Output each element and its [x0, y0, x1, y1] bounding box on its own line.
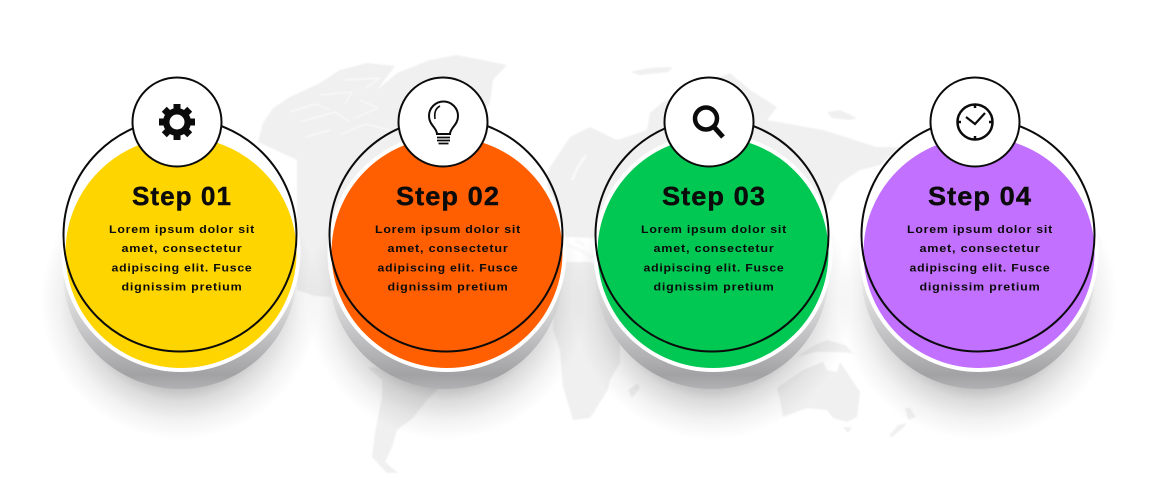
- step 03 card: [572, 78, 852, 440]
- shadow 02: [306, 155, 586, 440]
- icon: gear: [159, 104, 195, 140]
- body text 03: adipiscing elit. Fusce: [644, 262, 784, 274]
- body text 02: dignissim pretium: [388, 282, 508, 294]
- icon: clock: [957, 104, 993, 140]
- colour disc 01: [64, 135, 298, 370]
- body text 02: Lorem ipsum dolor sit: [375, 224, 521, 236]
- body text 03: dignissim pretium: [654, 282, 774, 294]
- body text 01: Lorem ipsum dolor sit: [109, 224, 255, 236]
- icon: light bulb: [429, 102, 458, 144]
- colour disc 03: [596, 135, 830, 370]
- body text 04: Lorem ipsum dolor sit: [907, 224, 1053, 236]
- shadow 01: [40, 155, 320, 440]
- icon circle 01: [132, 78, 222, 166]
- body text 01: adipiscing elit. Fusce: [112, 262, 252, 274]
- body text 01: amet, consectetur: [122, 243, 243, 255]
- body text 02: [375, 224, 521, 294]
- world map background: [258, 55, 916, 473]
- body text 03: [641, 224, 787, 294]
- step 02 card: [306, 78, 586, 440]
- icon: magnifier: [695, 108, 723, 137]
- colour disc 04: [862, 135, 1096, 370]
- step 04 card: [838, 78, 1118, 440]
- body text 02: amet, consectetur: [388, 243, 509, 255]
- icon circle 03: [664, 78, 754, 166]
- icon circle 04: [930, 78, 1020, 166]
- heading 01: Step 01: [132, 181, 232, 211]
- colour disc 02: [330, 135, 564, 370]
- body text 02: adipiscing elit. Fusce: [378, 262, 518, 274]
- icon circle 02: [398, 78, 488, 166]
- outline ring 02: [330, 118, 562, 352]
- map land masses: [258, 55, 916, 473]
- body text 03: Lorem ipsum dolor sit: [641, 224, 787, 236]
- body text 01: dignissim pretium: [122, 282, 242, 294]
- heading 03: Step 03: [662, 181, 766, 211]
- body text 04: dignissim pretium: [920, 282, 1040, 294]
- body text 03: amet, consectetur: [654, 243, 775, 255]
- body text 01: [109, 224, 255, 294]
- shadow 04: [838, 155, 1118, 440]
- outline ring 04: [862, 118, 1094, 352]
- heading 04: Step 04: [928, 181, 1032, 211]
- outline ring 03: [596, 118, 828, 352]
- body text 04: amet, consectetur: [920, 243, 1041, 255]
- body text 04: adipiscing elit. Fusce: [910, 262, 1050, 274]
- outline ring 01: [64, 118, 296, 352]
- heading 02: Step 02: [396, 181, 500, 211]
- step 01 card: [40, 78, 320, 440]
- map inlets and channels: [290, 78, 593, 258]
- body text 04: [907, 224, 1053, 294]
- shadow 03: [572, 155, 852, 440]
